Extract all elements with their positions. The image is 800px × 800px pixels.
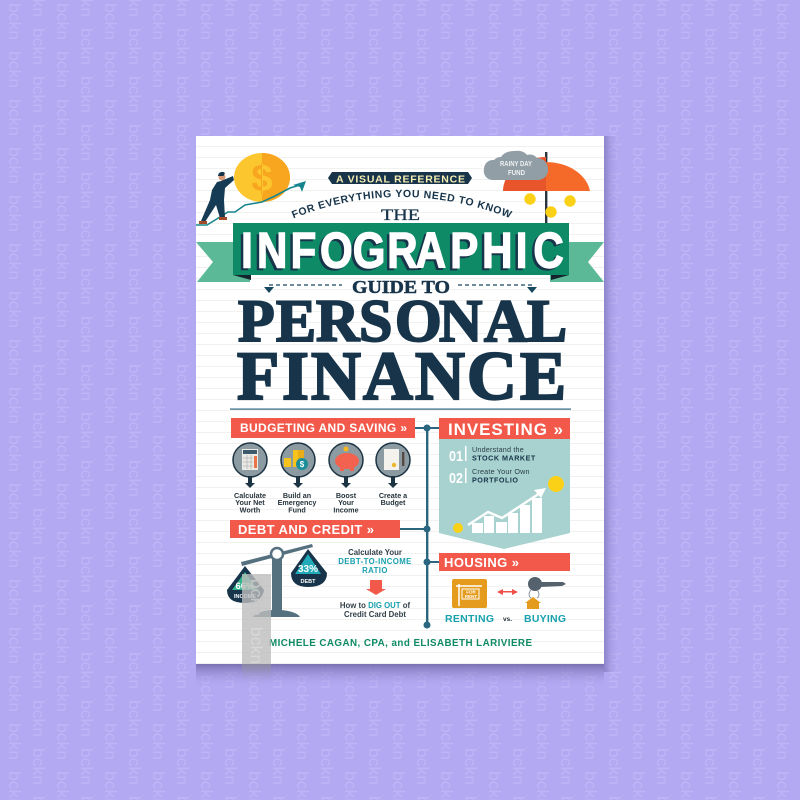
scale pan: income: 66%: [235, 581, 255, 592]
authors: MICHELE CAGAN, CPA, and ELISABETH LARIVIERE: [269, 638, 532, 649]
icon: for rent sign: RENT: [465, 594, 477, 599]
debt to income text: DEBT-TO-INCOME: [338, 557, 412, 566]
icon: emergency fund pin: [281, 443, 315, 488]
subheading: guide to: [264, 277, 537, 297]
badge: a visual reference: A VISUAL REFERENCE: [336, 174, 465, 186]
item 01: 01: [449, 448, 463, 465]
budgeting labels: Budget: [381, 498, 406, 507]
icon: rainy day umbrella: [484, 151, 590, 224]
icon: for rent sign: FOR: [466, 590, 476, 594]
budgeting labels: [234, 491, 408, 514]
translucent gray strip: bckn: [247, 579, 266, 616]
section header: debt and credit: [230, 520, 400, 538]
budgeting labels: Fund: [288, 506, 306, 514]
section header: investing: INVESTING »: [448, 420, 563, 439]
section header: debt and credit: DEBT AND CREDIT »: [238, 522, 374, 537]
ribbon tails: [196, 242, 250, 282]
title banner: infographic: INFOGRAPHIC: [241, 222, 564, 278]
icon: for rent sign: [452, 579, 487, 608]
icon: businessman: [199, 172, 234, 224]
divider line: [230, 408, 571, 410]
icon: gold coin: [234, 153, 290, 202]
dig out text: How to DIG OUT of: [340, 601, 410, 610]
icon: emergency fund pin: $: [300, 460, 305, 469]
dig out text: Credit Card Debt: [344, 610, 406, 619]
arched tagline: FOR EVERYTHING YOU NEED TO KNOW: [291, 190, 512, 218]
investing panel: [439, 439, 570, 549]
book cover: [196, 136, 604, 664]
rainy day cloud: RAINY DAY: [500, 161, 532, 168]
item 01: STOCK MARKET: [472, 454, 536, 462]
budgeting labels: Worth: [240, 506, 260, 514]
icon: red down arrow: [366, 580, 386, 595]
icon: budget document pin: [376, 443, 410, 488]
budgeting labels: Income: [333, 506, 359, 514]
rainy day cloud: [484, 151, 548, 180]
timeline connector: [400, 424, 440, 628]
budgeting labels: Create a: [379, 491, 408, 500]
translucent gray strip: bckn: [247, 627, 266, 664]
item 01: Understand the: [472, 445, 524, 454]
icon: house key: [525, 577, 566, 609]
section header: housing: HOUSING »: [444, 555, 519, 570]
heading: the: THE: [381, 207, 420, 224]
icon: gold coin: $: [251, 158, 273, 200]
section header: housing: [439, 553, 570, 571]
debt to income text: Calculate Your: [348, 548, 402, 557]
budgeting icons: [233, 443, 410, 488]
budgeting labels: Build an: [283, 491, 311, 500]
translucent gray strip: [242, 574, 271, 684]
item 01: [449, 445, 536, 465]
debt to income text: [338, 548, 412, 575]
icon: gold coin: $: [251, 158, 273, 200]
housing labels: vs.: [503, 616, 512, 623]
budgeting labels: Your Net: [235, 498, 265, 507]
budgeting labels: Emergency: [278, 498, 316, 507]
budgeting labels: Boost: [336, 491, 357, 500]
housing labels: [445, 613, 566, 625]
item 02: Create Your Own: [472, 467, 530, 476]
scale pan: income: [227, 566, 264, 603]
book shadow: [196, 136, 620, 688]
icon: calculator pin: [233, 443, 267, 488]
item 02: 02: [449, 470, 463, 487]
housing labels: BUYING: [524, 613, 566, 625]
growth chart: [468, 488, 546, 533]
icon: balance scale: [227, 544, 327, 617]
item 02: [449, 467, 530, 487]
scale pan: debt: [291, 549, 327, 587]
section header: budgeting and saving: [231, 418, 415, 438]
title: finance: FINANCE: [237, 338, 566, 414]
scale pan: income: INCOME: [234, 594, 256, 600]
icon: coins: [453, 476, 564, 533]
rainy day cloud: FUND: [508, 170, 525, 177]
section header: budgeting and saving: BUDGETING AND SAVING »: [240, 421, 407, 435]
budgeting labels: Calculate: [234, 491, 266, 500]
scale pan: debt: DEBT: [301, 579, 316, 585]
title: personal: PERSONAL: [238, 288, 567, 354]
icon: rising arrow: [196, 181, 306, 225]
budgeting labels: Your: [338, 498, 354, 507]
subheading: guide to: GUIDE TO: [352, 277, 450, 297]
icon: piggy bank pin: [329, 443, 363, 488]
dig out text: [340, 601, 410, 619]
title banner: infographic: INFOGRAPHIC: [239, 224, 561, 280]
icon: coins: [524, 193, 576, 218]
item 02: PORTFOLIO: [472, 476, 518, 484]
debt to income text: RATIO: [362, 566, 388, 575]
icon: double arrow: [497, 589, 518, 595]
housing labels: RENTING: [445, 613, 494, 625]
scale pan: debt: 33%: [298, 564, 318, 575]
icon: man pushing coin uphill: [196, 153, 306, 225]
